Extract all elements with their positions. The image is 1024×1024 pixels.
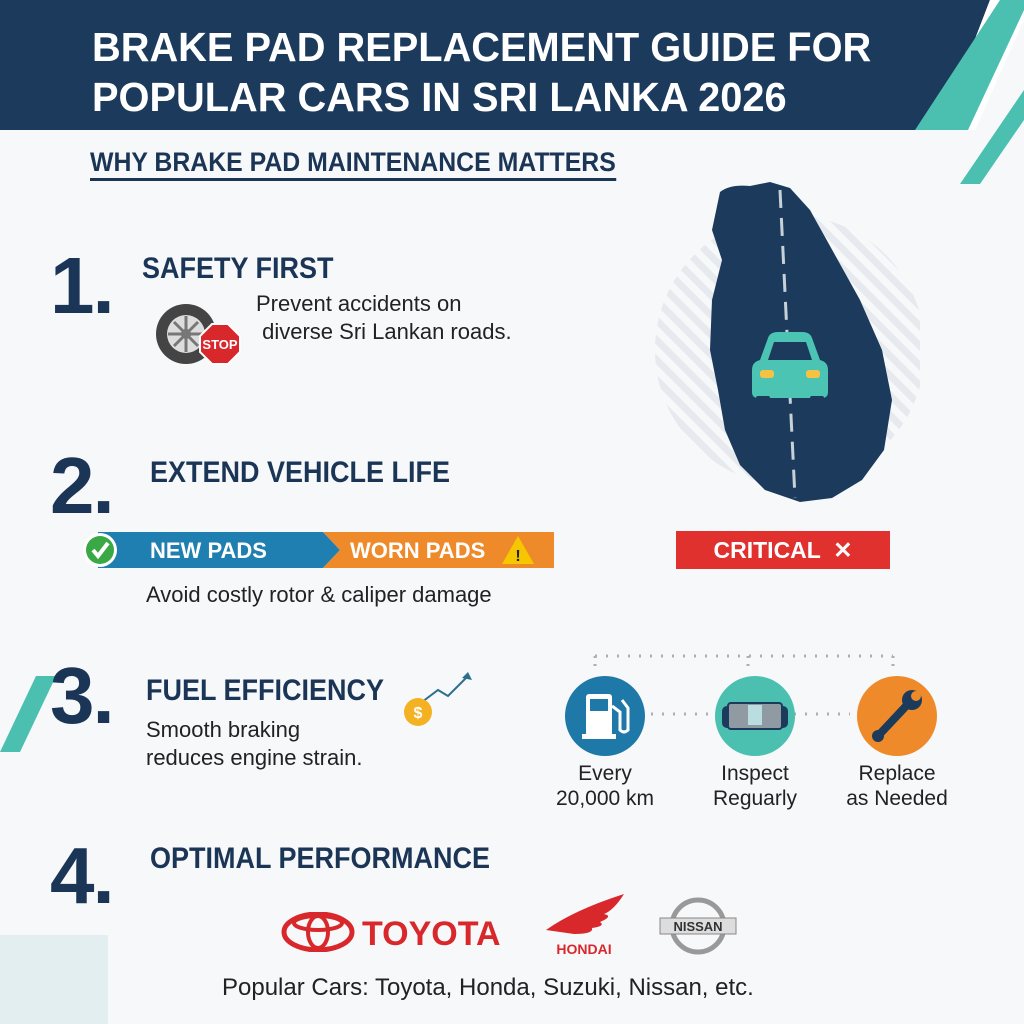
text: Avoid costly rotor & caliper damage [146,582,492,607]
header banner [0,0,1024,130]
process steps [556,654,948,810]
title: BRAKE PAD REPLACEMENT GUIDE FOR [92,24,871,70]
number 3: 3. [50,651,113,740]
text [146,717,362,770]
decorative corner block [0,935,108,1024]
logo: nissan: NISSAN [673,919,723,934]
map with car [655,182,920,502]
decorative teal stripe [960,90,1024,184]
step: every 20000 km [556,676,654,810]
text: reduces engine strain. [146,745,362,770]
logo: honda [546,894,624,957]
pad wear bar [86,532,554,568]
icon: tire with stop sign [156,304,239,364]
logo: toyota: TOYOTA [362,915,501,952]
pad wear bar: NEW PADS [150,538,267,563]
icon: coin with arrow [404,672,472,726]
step: every 20000 km: Every [578,762,632,785]
number 4: 4. [50,831,113,920]
step: inspect regularly: Inspect [721,762,789,785]
heading optimal performance: OPTIMAL PERFORMANCE [150,842,490,875]
heading safety first: SAFETY FIRST [142,252,334,285]
subtitle: WHY BRAKE PAD MAINTENANCE MATTERS [90,147,616,177]
text [256,291,512,344]
step: every 20000 km: 20,000 km [556,787,654,810]
title [92,24,871,120]
step: replace as needed: Replace [858,762,936,785]
section 4 [50,831,490,920]
step: replace as needed [846,676,948,810]
logo: honda: HONDAI [556,941,612,957]
heading fuel efficiency: FUEL EFFICIENCY [146,674,384,707]
text: diverse Sri Lankan roads. [262,319,512,344]
text: Prevent accidents on [256,291,461,316]
text: Smooth braking [146,717,300,742]
heading extend vehicle life: EXTEND VEHICLE LIFE [150,456,450,489]
pad wear bar: ! [515,548,521,565]
number 1: 1. [50,241,113,330]
number 2: 2. [50,441,113,530]
step: replace as needed: as Needed [846,787,948,810]
icon: coin with arrow: $ [414,705,423,722]
icon: tire with stop sign: STOP [202,337,238,352]
pad wear bar: WORN PADS [350,538,485,563]
critical label: CRITICAL ✕ [714,537,852,563]
section 2 [50,441,554,607]
step: inspect regularly [713,676,797,810]
logo: toyota [282,912,501,952]
step: inspect regularly: Reguarly [713,787,797,810]
caption popular cars: Popular Cars: Toyota, Honda, Suzuki, Nissan, etc. [222,974,754,1001]
logo: nissan [660,898,736,954]
title: POPULAR CARS IN SRI LANKA 2026 [92,74,787,120]
decorative teal left [0,676,55,752]
critical label [676,531,890,569]
brand logos [282,894,736,957]
icon: car [752,332,828,406]
section 3 [50,651,472,770]
section 1 [50,241,512,364]
